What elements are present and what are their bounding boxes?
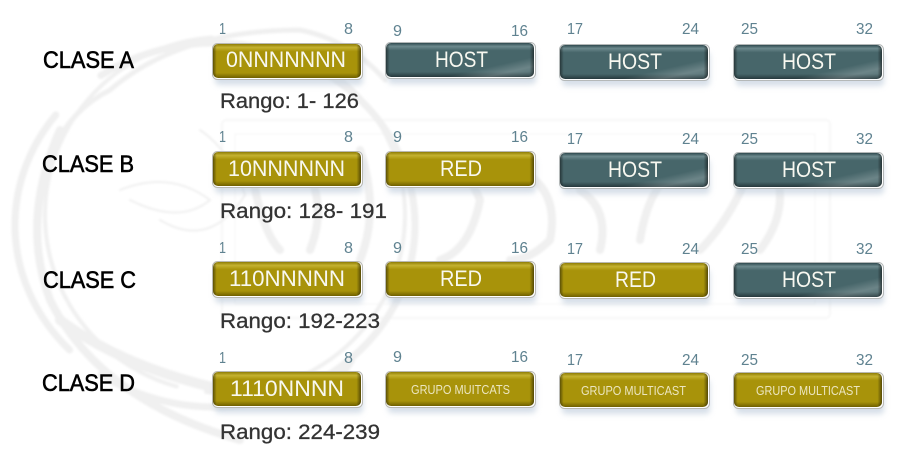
bit numbers: Clase A: 1 bbox=[219, 21, 226, 38]
bit numbers: Clase A: 17 bbox=[567, 21, 583, 38]
row: Clase A bbox=[43, 21, 884, 113]
row: Clase B bbox=[42, 129, 884, 223]
octet 4: Clase B bbox=[734, 152, 884, 194]
bit numbers: Clase B: 17 bbox=[567, 131, 583, 148]
octet 2: Clase D bbox=[386, 372, 536, 413]
octet 4: Clase D: GRUPO MULTICAST bbox=[756, 383, 860, 398]
bit numbers: Clase B: 24 bbox=[682, 131, 699, 148]
bit numbers: Clase B: 16 bbox=[511, 129, 528, 146]
octet 2: Clase A bbox=[386, 42, 536, 84]
octet 3: Clase B bbox=[560, 152, 710, 194]
bit numbers: Clase A: 16 bbox=[511, 23, 528, 40]
octet 4: Clase C: HOST bbox=[782, 267, 836, 292]
octet 4: Clase A: HOST bbox=[782, 49, 836, 74]
octet 2: Clase A: HOST bbox=[435, 47, 488, 72]
range: Clase A: Rango: 1- 126 bbox=[220, 90, 359, 113]
bit numbers: Clase D bbox=[219, 349, 873, 369]
bit numbers: Clase A: 25 bbox=[741, 21, 758, 38]
octet 1: Clase C: 110NNNNN bbox=[229, 266, 345, 291]
bit numbers: Clase C: 32 bbox=[856, 241, 873, 258]
octet 1: Clase C bbox=[212, 262, 363, 303]
octet 4: Clase A bbox=[734, 44, 884, 86]
octet 1: Clase B: 10NNNNNN bbox=[228, 156, 345, 181]
bit numbers: Clase D: 25 bbox=[741, 352, 758, 369]
octet 3: Clase D: GRUPO MULTICAST bbox=[581, 383, 686, 398]
octet 4: Clase B: HOST bbox=[782, 157, 836, 182]
octet 3: Clase A bbox=[560, 44, 710, 86]
range: Clase B: Rango: 128- 191 bbox=[220, 200, 387, 223]
octet 2: Clase B bbox=[386, 152, 536, 193]
bit numbers: Clase C: 17 bbox=[567, 241, 583, 258]
bit numbers: Clase C: 9 bbox=[393, 240, 402, 257]
heading: Clase C: CLASE C bbox=[43, 267, 136, 294]
bit numbers: Clase C: 8 bbox=[344, 240, 353, 257]
bit numbers: Clase C: 16 bbox=[511, 240, 528, 257]
bit numbers: Clase D: 17 bbox=[567, 352, 583, 369]
bit numbers: Clase D: 24 bbox=[682, 352, 699, 369]
octet 1: Clase A bbox=[212, 44, 363, 85]
octet 3: Clase C: RED bbox=[615, 267, 656, 292]
bit numbers: Clase A: 8 bbox=[344, 21, 353, 38]
octet 1: Clase D bbox=[212, 372, 363, 413]
bit numbers: Clase B: 8 bbox=[344, 129, 353, 146]
octet 3: Clase A: HOST bbox=[608, 49, 662, 74]
octet 2: Clase B: RED bbox=[440, 156, 482, 181]
bit numbers: Clase C: 24 bbox=[682, 241, 699, 258]
bit numbers: Clase B: 9 bbox=[393, 129, 402, 146]
range: Clase D: Rango: 224-239 bbox=[220, 421, 380, 444]
bit numbers: Clase A: 24 bbox=[682, 21, 699, 38]
bit numbers: Clase D: 8 bbox=[344, 350, 353, 367]
octet 1: Clase A: 0NNNNNNN bbox=[226, 47, 346, 72]
row: Clase C bbox=[43, 240, 884, 333]
octet 3: Clase B: HOST bbox=[608, 157, 662, 182]
background watermark bbox=[15, 30, 830, 440]
octet 1: Clase D: 1110NNNN bbox=[230, 376, 344, 401]
octet 3: Clase D bbox=[560, 372, 710, 414]
bit numbers: Clase B: 32 bbox=[856, 131, 873, 148]
bit numbers: Clase D: 1 bbox=[219, 350, 226, 367]
bit numbers: Clase A bbox=[219, 21, 873, 40]
octet 2: Clase D: GRUPO MUITCATS bbox=[411, 382, 510, 397]
octet 3: Clase C bbox=[560, 262, 710, 304]
range: Clase C: Rango: 192-223 bbox=[220, 310, 380, 333]
octet 2: Clase C bbox=[386, 262, 536, 303]
bit numbers: Clase A: 32 bbox=[856, 21, 873, 38]
bit numbers: Clase C: 1 bbox=[219, 240, 226, 257]
bit numbers: Clase C: 25 bbox=[741, 241, 758, 258]
bit numbers: Clase A: 9 bbox=[393, 23, 402, 40]
bit numbers: Clase B bbox=[219, 129, 873, 148]
octet 4: Clase D bbox=[734, 372, 884, 414]
octet 1: Clase B bbox=[212, 152, 363, 193]
octet 4: Clase C bbox=[734, 262, 884, 304]
heading: Clase A: CLASE A bbox=[43, 47, 134, 74]
heading: Clase B: CLASE B bbox=[42, 151, 134, 178]
row: Clase D bbox=[42, 349, 884, 444]
heading: Clase D: CLASE D bbox=[42, 370, 135, 397]
bit numbers: Clase D: 9 bbox=[393, 349, 402, 366]
bit numbers: Clase B: 1 bbox=[219, 129, 226, 146]
bit numbers: Clase B: 25 bbox=[741, 131, 758, 148]
bit numbers: Clase D: 16 bbox=[511, 349, 528, 366]
bit numbers: Clase C bbox=[219, 240, 873, 258]
bit numbers: Clase D: 32 bbox=[856, 352, 873, 369]
octet 2: Clase C: RED bbox=[440, 266, 482, 291]
